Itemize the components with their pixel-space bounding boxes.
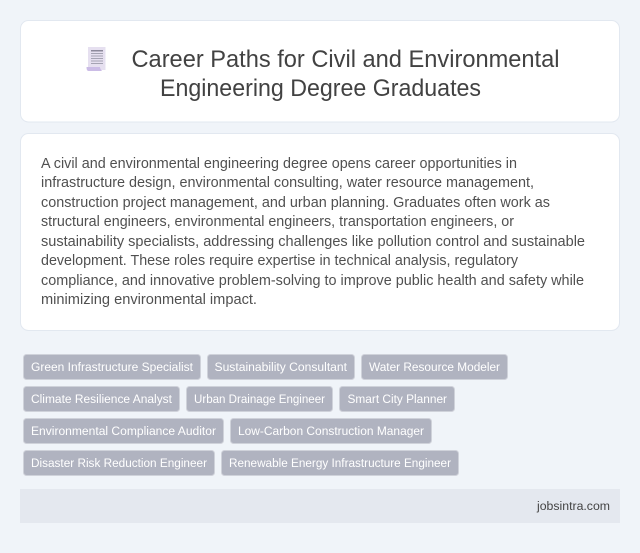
title: Career Paths for Civil and Environmental <box>132 46 560 73</box>
text block: description: sustainability specialists, addressing challenges like pollution control and sustainable <box>41 234 585 250</box>
title <box>132 46 560 102</box>
text block: description: construction project management, and urban planning. Graduates often work as <box>41 195 550 211</box>
text block: description <box>41 156 585 308</box>
text block: description: A civil and environmental engineering degree opens career opportunities in <box>41 156 517 172</box>
text block: description: minimizing environmental impact. <box>41 292 257 308</box>
icon: paper scroll <box>86 47 106 71</box>
tag <box>24 354 200 380</box>
tag: Environmental Compliance Auditor <box>31 424 216 438</box>
footer <box>20 489 620 523</box>
tag <box>362 354 508 380</box>
tag: Disaster Risk Reduction Engineer <box>31 456 207 470</box>
tag: Low-Carbon Construction Manager <box>238 424 424 438</box>
tag: Sustainability Consultant <box>214 360 348 374</box>
tag: Smart City Planner <box>348 392 447 406</box>
tag <box>222 450 458 476</box>
tag <box>24 386 180 412</box>
tag <box>24 450 214 476</box>
tag list <box>24 354 508 476</box>
tag <box>340 386 454 412</box>
tag <box>230 418 432 444</box>
text block: description: structural engineers, environmental engineers, transportation engineers, or <box>41 214 514 230</box>
tag: Green Infrastructure Specialist <box>31 360 194 374</box>
text block: description: infrastructure design, environmental consulting, water resource management, <box>41 175 534 191</box>
tag <box>208 354 354 380</box>
tag: Urban Drainage Engineer <box>194 392 325 406</box>
tag <box>186 386 332 412</box>
tag <box>24 418 224 444</box>
text block: description: compliance, and innovative problem-solving to improve public health and safety while <box>41 273 584 289</box>
footer: jobsintra.com <box>536 499 610 513</box>
tag: Climate Resilience Analyst <box>31 392 173 406</box>
tag: Renewable Energy Infrastructure Engineer <box>229 456 451 470</box>
tag: Water Resource Modeler <box>369 360 500 374</box>
text block: description: development. These roles require expertise in technical analysis, regulatory <box>41 253 519 269</box>
title: Engineering Degree Graduates <box>160 75 481 102</box>
panel: description <box>20 134 620 330</box>
panel: header <box>20 20 620 122</box>
